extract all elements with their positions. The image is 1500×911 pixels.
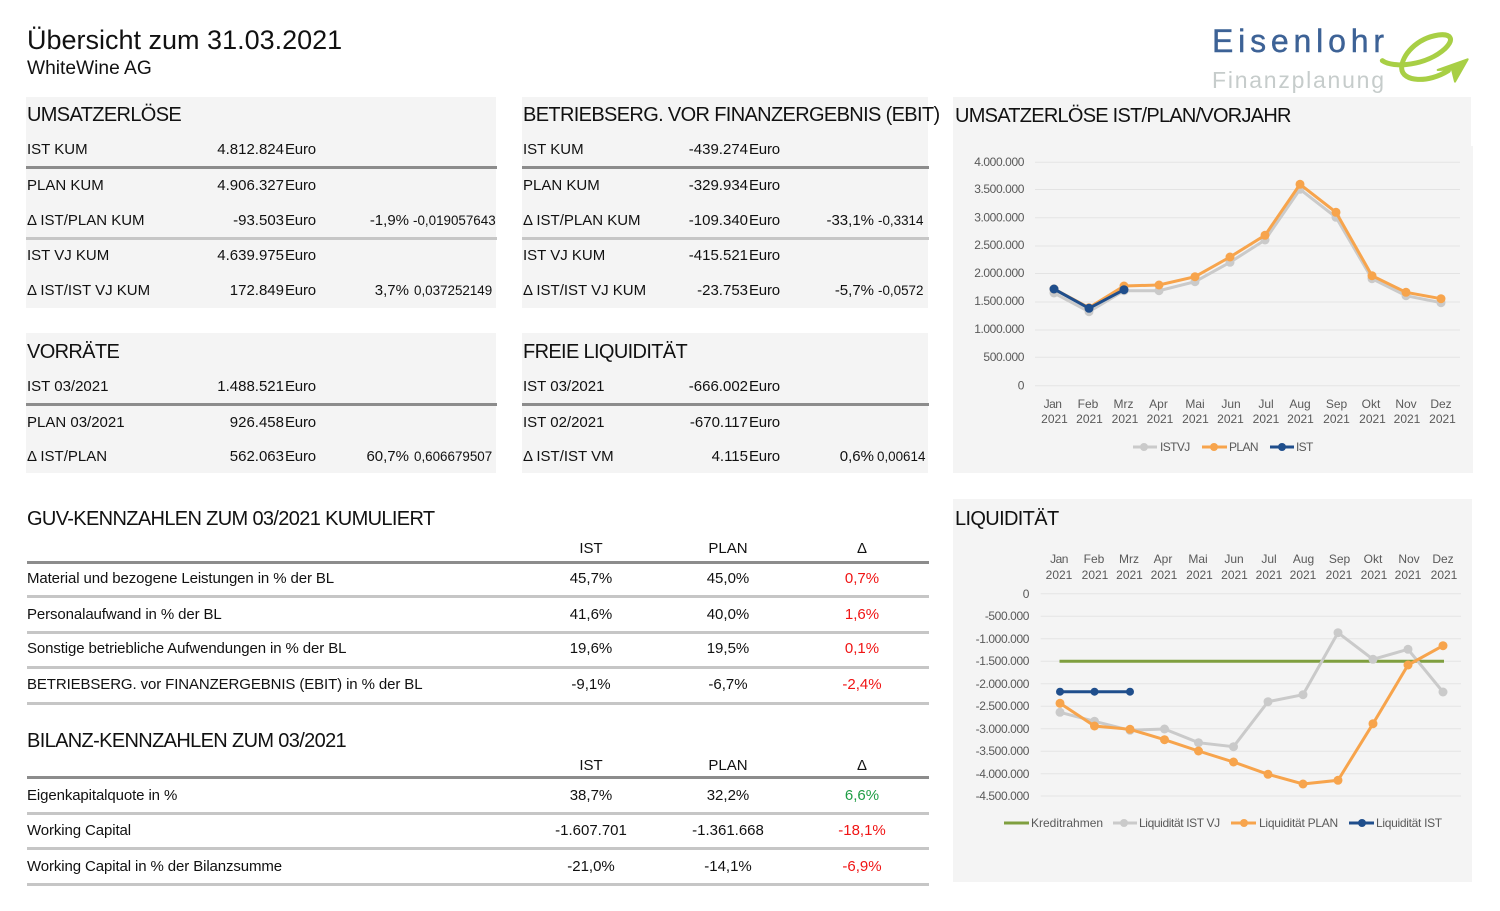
- row: PLAN KUM: Euro: [285, 177, 316, 194]
- row: PLAN KUM: -329.934: [689, 177, 748, 194]
- legend: Liquidität IST VJ: [1139, 816, 1220, 830]
- x axis labels: Mai: [1188, 552, 1208, 566]
- x axis labels: Nov: [1398, 552, 1420, 566]
- x axis labels: 2021: [1323, 412, 1350, 426]
- row: Working Capital in % der Bilanzsumme: [27, 858, 882, 875]
- row: IST KUM: -439.274: [689, 141, 748, 158]
- row: EBIT: -2,4%: [842, 676, 882, 693]
- row: PLAN 03/2021: PLAN 03/2021: [27, 414, 125, 431]
- row: Sonstige betriebliche Aufwendungen: [27, 640, 879, 657]
- table header: [579, 757, 867, 774]
- y axis labels: -2.500.000: [976, 699, 1030, 713]
- x axis labels: 2021: [1182, 412, 1209, 426]
- row: Delta IST/PLAN KUM: -33,1%: [826, 212, 874, 229]
- y axis labels: 2.500.000: [974, 238, 1025, 252]
- row: Delta IST/PLAN KUM: [27, 212, 496, 229]
- heading: EBIT: BETRIEBSERG. VOR FINANZERGEBNIS (EBIT): [523, 104, 939, 126]
- row: IST VJ KUM: 4.639.975: [217, 247, 284, 264]
- row: Delta IST/PLAN KUM: -0,019057643: [413, 213, 496, 228]
- line: Liquidität IST: [1056, 688, 1134, 696]
- row: Delta IST/IST VJ KUM: 172.849: [230, 282, 284, 299]
- row: Delta IST/IST VM: Euro: [749, 448, 780, 465]
- row: Delta IST/PLAN: [27, 448, 492, 465]
- row: IST KUM: IST KUM: [27, 141, 88, 158]
- row: Working Capital: -1.361.668: [692, 822, 764, 839]
- x axis labels: 2021: [1076, 412, 1103, 426]
- row: IST 03/2021: [27, 378, 316, 395]
- row: PLAN 03/2021: 926.458: [230, 414, 284, 431]
- legend: PLAN: [1229, 440, 1258, 454]
- x axis labels: 2021: [1151, 568, 1178, 582]
- row: IST 02/2021: [523, 414, 780, 431]
- row: EBIT: -6,7%: [708, 676, 748, 693]
- x axis labels: Sep: [1326, 397, 1347, 411]
- row: EBIT: [27, 676, 882, 693]
- legend: Liquidität PLAN: [1259, 816, 1338, 830]
- table header: PLAN: [708, 540, 748, 557]
- x axis labels: Apr: [1154, 552, 1172, 566]
- panel: Umsatzerlöse chart: [953, 97, 1473, 473]
- row: IST VJ KUM: IST VJ KUM: [523, 247, 605, 264]
- x axis labels: Jan: [1050, 552, 1068, 566]
- heading: Vorräte: VORRÄTE: [27, 341, 119, 363]
- row: PLAN KUM: 4.906.327: [217, 177, 284, 194]
- y axis labels: -4.000.000: [976, 767, 1030, 781]
- x axis labels: 2021: [1359, 412, 1386, 426]
- row: IST KUM: 4.812.824: [217, 141, 284, 158]
- legend: Liquidität IST: [1376, 816, 1443, 830]
- row: PLAN KUM: PLAN KUM: [523, 177, 600, 194]
- x axis labels: Dez: [1430, 397, 1452, 411]
- x axis labels: 2021: [1256, 568, 1283, 582]
- row: Delta IST/PLAN KUM: -0,3314: [878, 213, 923, 228]
- x axis labels: 2021: [1429, 412, 1456, 426]
- row: PLAN KUM: PLAN KUM: [27, 177, 104, 194]
- row: IST KUM: Euro: [749, 141, 780, 158]
- y axis labels: 1.500.000: [974, 294, 1025, 308]
- x axis labels: [1041, 397, 1456, 426]
- row: Delta IST/PLAN: 0,606679507: [414, 449, 492, 464]
- x axis labels: 2021: [1041, 412, 1068, 426]
- row: Personalaufwand: Personalaufwand in % der BL: [27, 606, 222, 623]
- x axis labels: 2021: [1361, 568, 1388, 582]
- row: IST VJ KUM: [523, 247, 780, 264]
- y axis labels: 1.000.000: [974, 322, 1025, 336]
- row: PLAN KUM: [523, 177, 780, 194]
- y axis labels: -3.500.000: [976, 744, 1030, 758]
- x axis labels: Okt: [1364, 552, 1383, 566]
- row: Delta IST/IST VM: 0,00614: [877, 449, 925, 464]
- row: Delta IST/PLAN: Δ IST/PLAN: [27, 448, 107, 465]
- logo: Eisenlohr Finanzplanung: [1212, 23, 1469, 93]
- y axis labels: 4.000.000: [974, 155, 1025, 169]
- row: Working Capital in % der Bilanzsumme: Working Capital in % der Bilanzsumme: [27, 858, 282, 875]
- row: Delta IST/PLAN KUM: -1,9%: [370, 212, 409, 229]
- row: IST 02/2021: IST 02/2021: [523, 414, 604, 431]
- title: Übersicht zum 31.03.2021: [27, 25, 342, 55]
- row: Material: 45,0%: [707, 570, 749, 587]
- line: PLAN: [1050, 180, 1446, 312]
- row: Eigenkapitalquote: [27, 787, 879, 804]
- line: Liquidität PLAN: [1056, 641, 1448, 788]
- x axis labels: Jul: [1258, 397, 1274, 411]
- row: IST VJ KUM: -415.521: [689, 247, 748, 264]
- x axis labels: Aug: [1289, 397, 1311, 411]
- y axis labels: [976, 587, 1030, 803]
- x axis labels: 2021: [1221, 568, 1248, 582]
- row: Delta IST/IST VJ KUM: Euro: [749, 282, 780, 299]
- row: Delta IST/IST VJ KUM: -5,7%: [835, 282, 874, 299]
- row: Material: Material und bezogene Leistungen in % der BL: [27, 570, 334, 587]
- row: Eigenkapitalquote: 6,6%: [845, 787, 879, 804]
- x axis labels: Jul: [1261, 552, 1277, 566]
- heading: Umsatzerlöse: UMSATZERLÖSE: [27, 104, 181, 126]
- row: EBIT: -9,1%: [571, 676, 611, 693]
- y axis labels: 3.000.000: [974, 210, 1025, 224]
- row: IST KUM: Euro: [285, 141, 316, 158]
- row: Delta IST/IST VM: [523, 448, 926, 465]
- row: Sonstige betriebliche Aufwendungen: 19,6%: [570, 640, 612, 657]
- row: Sonstige betriebliche Aufwendungen: Sonstige betriebliche Aufwendungen in % der BL: [27, 640, 346, 657]
- row: Delta IST/IST VM: 0,6%: [840, 448, 874, 465]
- y axis labels: 2.000.000: [974, 266, 1025, 280]
- table: GuV-Kennzahlen: [27, 508, 929, 705]
- x axis labels: 2021: [1147, 412, 1174, 426]
- table header: IST: [579, 757, 603, 774]
- row: Delta IST/IST VM: 4.115: [712, 448, 748, 465]
- line: Kreditrahmen: [1060, 660, 1444, 663]
- y axis labels: -3.000.000: [976, 722, 1030, 736]
- row: Eigenkapitalquote: 38,7%: [570, 787, 612, 804]
- row: IST 03/2021: IST 03/2021: [27, 378, 108, 395]
- row: IST 03/2021: IST 03/2021: [523, 378, 604, 395]
- x axis labels: 2021: [1116, 568, 1143, 582]
- legend: [1133, 440, 1314, 454]
- table header: PLAN: [708, 757, 748, 774]
- row: IST 02/2021: Euro: [749, 414, 780, 431]
- x axis labels: 2021: [1082, 568, 1109, 582]
- x axis labels: Mrz: [1119, 552, 1139, 566]
- row: Delta IST/IST VJ KUM: -0,0572: [878, 283, 923, 298]
- y axis labels: 500.000: [983, 350, 1025, 364]
- x axis labels: Feb: [1078, 397, 1099, 411]
- row: IST 03/2021: Euro: [285, 378, 316, 395]
- row: Delta IST/IST VJ KUM: [523, 282, 923, 299]
- x axis labels: Aug: [1293, 552, 1314, 566]
- row: Delta IST/PLAN KUM: Δ IST/PLAN KUM: [523, 212, 641, 229]
- row: EBIT: BETRIEBSERG. vor FINANZERGEBNIS (EBIT) in % der BL: [27, 676, 422, 693]
- row: PLAN 03/2021: Euro: [285, 414, 316, 431]
- row: IST KUM: [523, 141, 780, 158]
- panel: Freie Liquidität: [522, 333, 928, 473]
- row: Personalaufwand: 41,6%: [570, 606, 612, 623]
- row: Sonstige betriebliche Aufwendungen: 0,1%: [845, 640, 879, 657]
- row: Sonstige betriebliche Aufwendungen: 19,5%: [707, 640, 749, 657]
- row: Working Capital in % der Bilanzsumme: -14,1%: [704, 858, 752, 875]
- row: IST 03/2021: Euro: [749, 378, 780, 395]
- row: Delta IST/PLAN KUM: Euro: [285, 212, 316, 229]
- line: IST: [1050, 284, 1128, 313]
- row: Delta IST/IST VM: Δ IST/IST VM: [523, 448, 614, 465]
- row: PLAN KUM: [27, 177, 316, 194]
- line: IST VJ: [1050, 185, 1446, 316]
- table header: Δ: [857, 757, 867, 774]
- row: IST 02/2021: -670.117: [690, 414, 748, 431]
- heading: GuV-Kennzahlen: GUV-KENNZAHLEN ZUM 03/2021 KUMULIERT: [27, 508, 434, 530]
- row: Material: 0,7%: [845, 570, 879, 587]
- heading: Liquidität: LIQUIDITÄT: [955, 508, 1059, 530]
- row: Delta IST/IST VJ KUM: -23.753: [697, 282, 748, 299]
- x axis labels: Okt: [1362, 397, 1381, 411]
- row: Working Capital in % der Bilanzsumme: -21,0%: [567, 858, 615, 875]
- panel: Vorräte: [26, 333, 496, 473]
- x axis labels: Apr: [1149, 397, 1168, 411]
- row: Delta IST/IST VJ KUM: 3,7%: [375, 282, 409, 299]
- x axis labels: Sep: [1329, 552, 1350, 566]
- row: Working Capital: -1.607.701: [555, 822, 627, 839]
- y axis labels: 0: [1023, 587, 1030, 601]
- x axis labels: Feb: [1084, 552, 1105, 566]
- line: Liquidität IST VJ: [1056, 628, 1448, 751]
- x axis labels: 2021: [1046, 568, 1073, 582]
- x axis labels: Dez: [1432, 552, 1454, 566]
- heading: Umsatzerlöse IST/PLAN/Vorjahr: UMSATZERLÖSE IST/PLAN/VORJAHR: [955, 105, 1291, 127]
- legend: ISTVJ: [1160, 440, 1190, 454]
- table header: [579, 540, 867, 557]
- y axis labels: -500.000: [985, 609, 1030, 623]
- row: Delta IST/IST VJ KUM: Δ IST/IST VJ KUM: [27, 282, 150, 299]
- x axis labels: Jun: [1224, 552, 1244, 566]
- legend: [1004, 816, 1443, 830]
- row: Personalaufwand: [27, 606, 879, 623]
- x axis labels: Jun: [1221, 397, 1241, 411]
- row: Delta IST/PLAN: 562.063: [230, 448, 284, 465]
- row: IST VJ KUM: IST VJ KUM: [27, 247, 109, 264]
- row: Delta IST/PLAN KUM: -109.340: [689, 212, 748, 229]
- subtitle: company name: WhiteWine AG: [27, 58, 152, 79]
- row: Delta IST/IST VJ KUM: Euro: [285, 282, 316, 299]
- row: Material: 45,7%: [570, 570, 612, 587]
- y axis labels: -4.500.000: [976, 789, 1030, 803]
- row: Working Capital in % der Bilanzsumme: -6,9%: [842, 858, 882, 875]
- row: IST KUM: [27, 141, 316, 158]
- row: Material: [27, 570, 879, 587]
- x axis labels: 2021: [1112, 412, 1139, 426]
- x axis labels: 2021: [1394, 412, 1421, 426]
- row: Delta IST/PLAN: 60,7%: [366, 448, 409, 465]
- row: IST KUM: IST KUM: [523, 141, 584, 158]
- y axis labels: [974, 155, 1025, 392]
- row: Eigenkapitalquote: Eigenkapitalquote in %: [27, 787, 177, 804]
- row: Working Capital: Working Capital: [27, 822, 131, 839]
- legend: Kreditrahmen: [1031, 816, 1103, 830]
- x axis labels: 2021: [1186, 568, 1213, 582]
- row: Delta IST/PLAN KUM: -93.503: [233, 212, 284, 229]
- legend: IST: [1296, 440, 1314, 454]
- panel: Umsatzerlöse: [26, 97, 496, 308]
- x axis labels: 2021: [1253, 412, 1280, 426]
- y axis labels: -2.000.000: [976, 677, 1030, 691]
- x axis labels: 2021: [1326, 568, 1353, 582]
- panel: Betriebserg. vor Finanzergebnis (EBIT): [522, 97, 928, 308]
- row: Delta IST/PLAN KUM: Euro: [749, 212, 780, 229]
- x axis labels: Mrz: [1114, 397, 1134, 411]
- logo: Eisenlohr Finanzplanung: Eisenlohr: [1212, 23, 1384, 59]
- row: PLAN KUM: Euro: [749, 177, 780, 194]
- y axis labels: -1.000.000: [976, 632, 1030, 646]
- row: PLAN 03/2021: [27, 414, 316, 431]
- x axis labels: 2021: [1431, 568, 1458, 582]
- row: Personalaufwand: 40,0%: [707, 606, 749, 623]
- x axis labels: 2021: [1290, 568, 1317, 582]
- logo: Eisenlohr Finanzplanung: Finanzplanung: [1212, 67, 1384, 93]
- x axis labels: 2021: [1217, 412, 1244, 426]
- row: Delta IST/IST VJ KUM: [27, 282, 492, 299]
- row: IST 03/2021: 1.488.521: [217, 378, 284, 395]
- y axis labels: -1.500.000: [976, 654, 1030, 668]
- table: Bilanz-Kennzahlen: [27, 730, 929, 886]
- row: Delta IST/PLAN: Euro: [285, 448, 316, 465]
- x axis labels: Mai: [1185, 397, 1205, 411]
- row: Personalaufwand: 1,6%: [845, 606, 879, 623]
- row: IST 03/2021: [523, 378, 780, 395]
- row: IST 03/2021: -666.002: [689, 378, 748, 395]
- row: Working Capital: [27, 822, 886, 839]
- row: Eigenkapitalquote: 32,2%: [707, 787, 749, 804]
- heading: Freie Liquidität: FREIE LIQUIDITÄT: [523, 341, 687, 363]
- row: Delta IST/PLAN KUM: Δ IST/PLAN KUM: [27, 212, 145, 229]
- heading: Bilanz-Kennzahlen: BILANZ-KENNZAHLEN ZUM 03/2021: [27, 730, 346, 752]
- row: Working Capital: -18,1%: [838, 822, 886, 839]
- x axis labels: Jan: [1044, 397, 1061, 411]
- panel: Liquidität chart: [953, 499, 1472, 882]
- x axis labels: [1046, 552, 1458, 582]
- x axis labels: 2021: [1395, 568, 1422, 582]
- y axis labels: 3.500.000: [974, 182, 1025, 196]
- x axis labels: 2021: [1287, 412, 1314, 426]
- row: Delta IST/IST VJ KUM: Δ IST/IST VJ KUM: [523, 282, 646, 299]
- table header: Δ: [857, 540, 867, 557]
- y axis labels: 0: [1018, 378, 1025, 392]
- row: IST VJ KUM: Euro: [285, 247, 316, 264]
- row: Delta IST/IST VJ KUM: 0,037252149: [414, 283, 492, 298]
- row: Delta IST/PLAN KUM: [523, 212, 924, 229]
- row: IST VJ KUM: Euro: [749, 247, 780, 264]
- table header: IST: [579, 540, 603, 557]
- row: IST VJ KUM: [27, 247, 316, 264]
- x axis labels: Nov: [1395, 397, 1417, 411]
